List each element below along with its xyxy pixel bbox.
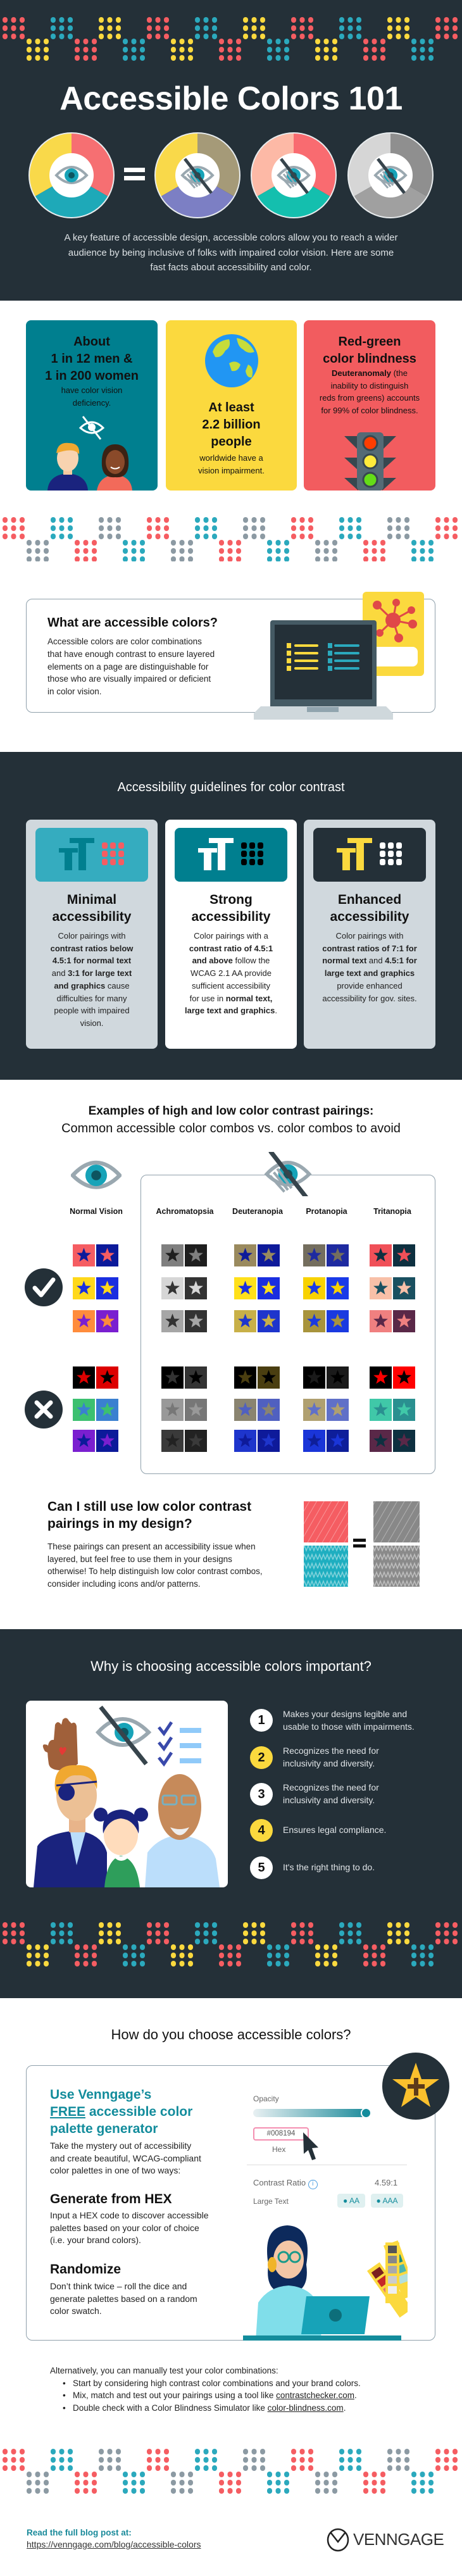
card: enhanced accessibility (304, 820, 435, 1049)
item 4 (250, 1819, 386, 1842)
item 4: 4 (258, 1823, 265, 1837)
icon: x circle (25, 1391, 63, 1429)
intro paragraph: audience by being inclusive of folks with impaired color vision. Here are some (68, 247, 394, 258)
heading: use venngage generator (50, 2087, 192, 2135)
item 5: 5 (258, 1861, 265, 1875)
card: minimal accessibility: 4.5:1 for normal text (53, 956, 131, 965)
fact card: 2.2 billion: people (211, 434, 252, 448)
UI mockup: contrast tool: Large Text (253, 2197, 289, 2206)
illustration: patterned squares (304, 1501, 420, 1587)
heading: use venngage generator: FREE accessible color (50, 2104, 192, 2119)
text: low contrast advice: consider including icons and/or patterns. (47, 1579, 201, 1589)
icon: slashed eye (265, 1152, 311, 1196)
fact card: 2.2 billion: At least (208, 400, 254, 414)
card: strong accessibility: contrast ratio of 4.5:1 (189, 944, 273, 953)
UI mockup: contrast tool: Contrast Ratio (253, 2178, 306, 2187)
fact card: 2.2 billion: worldwide have a (199, 453, 263, 463)
header: dark intro section (0, 0, 462, 301)
heading: how do you choose: How do you choose accessible colors? (111, 2027, 351, 2042)
title: Accessible Colors 101 (59, 80, 403, 117)
UI mockup: contrast tool: ● AA (343, 2196, 359, 2205)
item 5 (250, 1856, 375, 1879)
card: enhanced accessibility: provide enhanced (337, 981, 403, 991)
footer: blog link (27, 2528, 201, 2549)
icon: globe (205, 334, 258, 387)
card: strong accessibility: WCAG 2.1 AA provide (190, 968, 272, 978)
card: strong accessibility: sufficient accessibility (192, 981, 270, 991)
footer: blog link: Read the full blog post at: (27, 2528, 132, 2537)
text: hex: (i.e. your brand colors). (50, 2235, 141, 2245)
text: intro: color palettes in one of two ways: (50, 2165, 180, 2175)
text: randomize (50, 2281, 197, 2316)
footer: blog link: https://venngage.com/blog/accessible-colors (27, 2539, 201, 2549)
column labels: Deuteranopia (232, 1207, 283, 1216)
text: manual testing bullets: • Start by considering high contrast color combinations and your brand colors. (63, 2379, 361, 2388)
text: definition: in color vision. (47, 687, 102, 696)
fact card: red-green color blindness: Deuteranomaly (the (332, 368, 408, 378)
swatch grid (25, 1244, 415, 1452)
fact card: 2.2 billion: 2.2 billion (202, 418, 261, 432)
logo: venngage (327, 2528, 444, 2552)
UI mockup: contrast tool: Opacity (253, 2094, 279, 2103)
heading: guidelines: Accessibility guidelines for color contrast (117, 780, 345, 794)
card: enhanced accessibility: normal text and 4.5:1 for (322, 956, 417, 965)
heading: randomize: Randomize (50, 2262, 121, 2277)
item 2: 2 (258, 1751, 265, 1765)
fact card: red-green color blindness: Red-green (339, 334, 401, 348)
text: randomize: generate palettes based on a random (50, 2294, 197, 2304)
card: strong accessibility: large text and graphics. (185, 1006, 277, 1015)
icon: check circle (25, 1268, 63, 1306)
item 5: It's the right thing to do. (283, 1862, 375, 1872)
intro paragraph (65, 232, 397, 273)
item 3 (250, 1782, 379, 1806)
card: minimal accessibility: contrast ratios below (51, 944, 133, 953)
card: enhanced accessibility: contrast ratios of 7:1 for (322, 944, 417, 953)
heading: use venngage generator: Use Venngage’s (50, 2087, 151, 2101)
text: intro: Take the mystery out of accessibility (50, 2141, 191, 2151)
item 3: 3 (258, 1787, 265, 1801)
fact card: 1 in 12 men (26, 320, 158, 491)
text: low contrast advice: These pairings can present an accessibility issue when (47, 1542, 256, 1551)
fact card: red-green color blindness (304, 320, 435, 491)
text: intro: and create beautiful, WCAG-compliant (50, 2153, 201, 2163)
section: accessibility guidelines (dark) (0, 752, 462, 1080)
item 1 (250, 1709, 415, 1732)
text: manual testing bullets (50, 2366, 361, 2413)
fact card: 2.2 billion: vision impairment. (198, 466, 265, 475)
column labels: Normal Vision (70, 1207, 123, 1216)
UI mockup: contrast tool: Hex (272, 2145, 285, 2154)
fact card: 1 in 12 men: 1 in 200 women (45, 368, 139, 382)
icon: low contrast text (35, 828, 148, 882)
text: randomize: Don’t think twice – roll the dice and (50, 2281, 187, 2291)
heading: use venngage generator: palette generator (50, 2122, 158, 2135)
heading: examples of contrast pairings: Examples of high and low color contrast pairings: (89, 1104, 373, 1118)
card: enhanced accessibility: large text and graphics (325, 968, 415, 978)
card: strong accessibility: accessibility (192, 909, 270, 924)
UI mockup: contrast tool: i (312, 2180, 313, 2187)
illustration card: people & icons (26, 1701, 228, 1887)
item 1: 1 (258, 1713, 265, 1727)
item 2 (250, 1746, 379, 1769)
icon: enhanced contrast text (313, 828, 426, 882)
card: minimal accessibility (26, 820, 158, 1049)
card: minimal accessibility: difficulties for many (56, 994, 127, 1003)
UI mockup: contrast tool: ● AAA (377, 2196, 397, 2205)
numbered list: reasons (250, 1709, 415, 1879)
color wheels with eye icons (28, 132, 434, 218)
heading: why: Why is choosing accessible colors important? (91, 1658, 371, 1674)
item 4: Ensures legal compliance. (283, 1825, 386, 1835)
fact card: 1 in 12 men: deficiency. (73, 398, 111, 408)
people illustration (47, 443, 132, 491)
card: strong accessibility: Strong (209, 892, 253, 906)
panel: color blindness simulations box (140, 1175, 435, 1474)
card: enhanced accessibility: Color pairings with (336, 931, 403, 941)
heading: can I still use low contrast: Can I still use low color contrast (47, 1499, 251, 1514)
fact card: red-green color blindness: color blindness (323, 352, 416, 366)
item 1: Makes your designs legible and (283, 1709, 407, 1719)
badge: star icon (382, 2053, 449, 2120)
card: minimal accessibility: vision. (80, 1018, 103, 1028)
column labels (70, 1207, 411, 1216)
card: strong accessibility: and above follow the (192, 956, 270, 965)
column labels: Achromatopsia (156, 1207, 214, 1216)
text: definition: those who are visually impaired or deficient (47, 674, 211, 684)
text: low contrast advice: otherwise! To help distinguish low color contrast combos, (47, 1566, 263, 1576)
fact card: red-green color blindness: inability to distinguish (331, 381, 408, 391)
decorative dot strip: bottom (3, 2449, 458, 2494)
text: manual testing bullets: • Double check with a Color Blindness Simulator like color-blindness.com. (63, 2403, 346, 2413)
item 1: usable to those with impairments. (283, 1722, 415, 1732)
panel: palette generator (26, 2065, 435, 2341)
card: strong accessibility: Color pairings with a (194, 931, 268, 941)
subheading: combos: Common accessible color combos vs. color combos to avoid (61, 1122, 401, 1135)
intro paragraph: fast facts about accessibility and color. (150, 262, 312, 273)
card: strong accessibility (165, 820, 297, 1049)
decorative dot strip: middle (3, 517, 458, 561)
heading: can I still use low contrast: pairings in my design? (47, 1516, 192, 1530)
card: minimal accessibility: and graphics cause (54, 981, 130, 991)
decorative dot strip: top (3, 17, 458, 61)
illustration: laptop with network card (254, 592, 424, 720)
section: why choose accessible colors (dark) (0, 1629, 462, 1998)
text: manual testing bullets: • Mix, match and test out your pairings using a tool like contrastchecker.com. (63, 2391, 357, 2400)
card: minimal accessibility: accessibility (53, 909, 131, 924)
text: intro (50, 2141, 201, 2175)
item 3: inclusivity and diversity. (283, 1795, 375, 1805)
heading: generate from hex: Generate from HEX (50, 2192, 172, 2206)
heading: what are accessible colors: What are accessible colors? (47, 616, 218, 630)
column labels: Protanopia (306, 1207, 347, 1216)
text: hex (50, 2210, 209, 2245)
text: randomize: color swatch. (50, 2306, 102, 2316)
text: definition: Accessible colors are color combinations (47, 637, 202, 646)
item 2: inclusivity and diversity. (283, 1758, 375, 1768)
card: minimal accessibility: Color pairings with (58, 931, 125, 941)
card: minimal accessibility: Minimal (67, 892, 116, 906)
text: definition: elements on a page are distinguishable for (47, 662, 208, 671)
icon: normal eye (71, 1161, 122, 1189)
text: low contrast advice: layered, but feel free to use them in your designs (47, 1554, 232, 1564)
text: hex: palettes based on your color of choice (50, 2223, 199, 2233)
panel: what are accessible colors (26, 599, 435, 713)
UI mockup: contrast tool: #008194 (267, 2130, 295, 2137)
fact card: red-green color blindness: reds from greens) accounts (320, 393, 420, 403)
intro paragraph: A key feature of accessible design, accessible colors allow you to reach a wider (65, 232, 397, 243)
fact card: 1 in 12 men: have color vision (61, 385, 122, 395)
logo: venngage: VENNGAGE (353, 2530, 444, 2549)
card: enhanced accessibility: accessibility (330, 909, 409, 924)
text: definition: that have enough contrast to ensure layered (47, 649, 215, 659)
UI mockup: contrast tool (247, 2094, 407, 2208)
icon: traffic light (344, 432, 396, 491)
item 2: Recognizes the need for (283, 1746, 379, 1756)
icon: strong contrast text (175, 828, 287, 882)
card: enhanced accessibility: Enhanced (338, 892, 401, 906)
card: minimal accessibility: people with impaired (54, 1006, 130, 1015)
icon: eye slash (78, 416, 105, 440)
text: definition (47, 637, 215, 696)
item 3: Recognizes the need for (283, 1782, 379, 1792)
text: hex: Input a HEX code to discover accessible (50, 2210, 209, 2220)
fact card: 1 in 12 men: About (73, 334, 110, 348)
text: manual testing bullets: Alternatively, you can manually test your color combinations: (50, 2366, 278, 2375)
heading: can I still use low contrast (47, 1499, 251, 1530)
UI mockup: contrast tool: 4.59:1 (375, 2178, 397, 2187)
fact card: 1 in 12 men: 1 in 12 men & (51, 352, 132, 366)
card: strong accessibility: for use in normal text, (190, 994, 272, 1003)
fact card: 2.2 billion (166, 320, 297, 491)
decorative dot strip: dark (3, 1922, 458, 1966)
column labels: Tritanopia (373, 1207, 411, 1216)
text: low contrast advice (47, 1542, 263, 1589)
illustration: woman with headset and swatches (243, 2225, 408, 2341)
fact card: red-green color blindness: for 99% of color blindness. (321, 406, 418, 415)
card: enhanced accessibility: accessibility for gov. sites. (322, 994, 417, 1003)
card: minimal accessibility: and 3:1 for large text (52, 968, 132, 978)
